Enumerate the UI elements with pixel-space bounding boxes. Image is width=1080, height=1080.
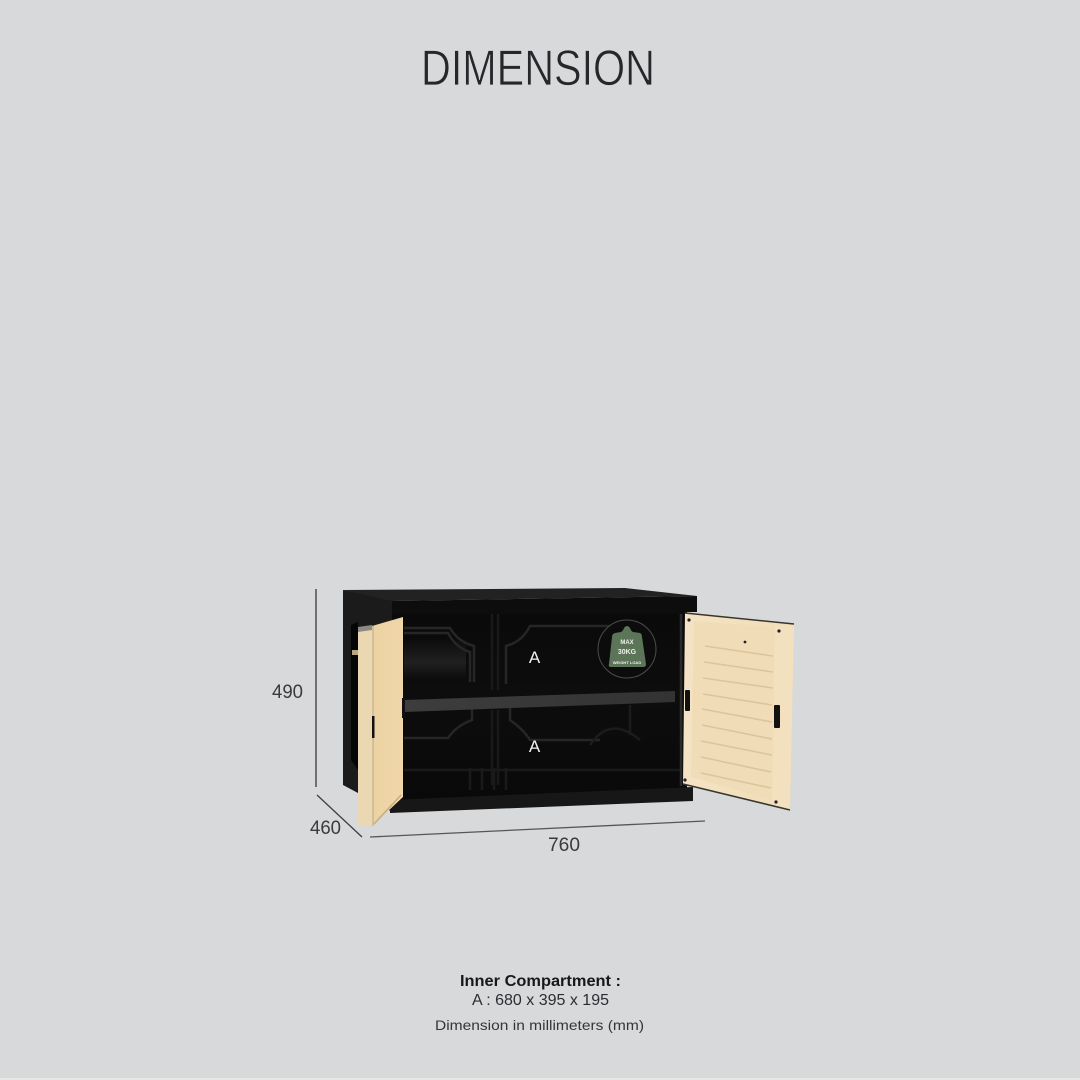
- right door: [683, 613, 794, 810]
- cabinet body: [343, 588, 697, 813]
- compartment label A upper: A: [529, 648, 541, 667]
- badge: max 30kg weight load: 30KG: [618, 649, 637, 656]
- cabinet illustration: [343, 588, 794, 826]
- inner compartment heading: Inner Compartment :: [460, 973, 621, 990]
- title: DIMENSION: [421, 40, 655, 96]
- units note: Dimension in millimeters (mm): [435, 1017, 644, 1033]
- label: 490: 490: [272, 682, 303, 703]
- dimension line: depth: [317, 795, 362, 837]
- badge: max 30kg weight load: MAX: [620, 640, 634, 646]
- badge: max 30kg weight load: [598, 620, 656, 678]
- left door: [352, 617, 405, 826]
- shelf: [404, 691, 675, 712]
- dimension line: width: [370, 821, 705, 837]
- inner compartment size: A : 680 x 395 x 195: [472, 992, 609, 1009]
- interior panel mouldings: [404, 614, 681, 790]
- compartment label A lower: A: [529, 737, 541, 756]
- label: 760: 760: [548, 835, 580, 856]
- label: 460: 460: [310, 818, 341, 839]
- badge: max 30kg weight load: WEIGHT LOAD: [613, 660, 641, 665]
- dimension line: height: [315, 589, 317, 787]
